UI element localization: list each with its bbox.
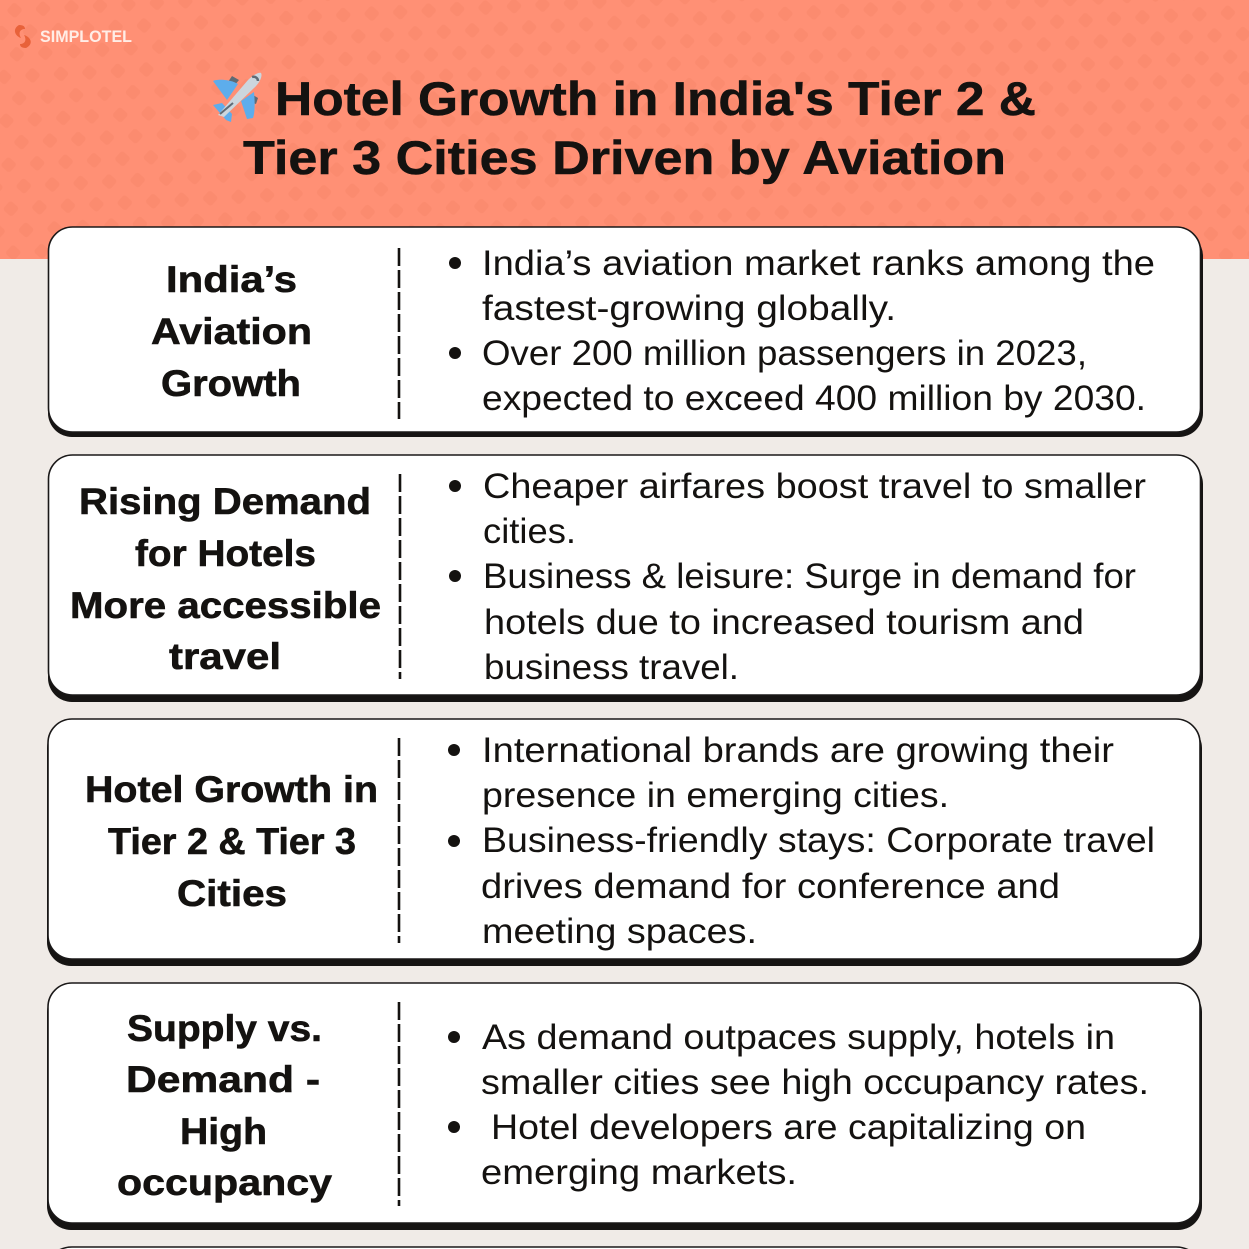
heading: Hotel Growth in bbox=[85, 769, 378, 810]
divider bbox=[398, 248, 400, 419]
heading: travel bbox=[169, 636, 281, 677]
bullet list: hotels due to increased tourism and bbox=[484, 603, 1084, 642]
bullet list: International brands are growing their bbox=[482, 731, 1114, 770]
card body bbox=[48, 983, 1200, 1223]
card body bbox=[48, 719, 1200, 959]
heading: Tier 2 & Tier 3 bbox=[108, 821, 356, 862]
header band bbox=[0, 0, 1249, 259]
bullet list bbox=[449, 467, 1146, 687]
bullet list: Hotel developers are capitalizing on bbox=[491, 1108, 1086, 1147]
card shadow bbox=[47, 724, 1202, 966]
heading: Rising Demand bbox=[79, 481, 371, 522]
bullet list: India’s aviation market ranks among the bbox=[482, 244, 1155, 283]
bullet list: emerging markets. bbox=[481, 1153, 797, 1192]
title line 1: Hotel Growth in India's Tier 2 & bbox=[275, 72, 1036, 125]
heading bbox=[85, 769, 378, 914]
bullet list: Cheaper airfares boost travel to smaller bbox=[483, 467, 1146, 506]
bullet list: Over 200 million passengers in 2023, bbox=[482, 334, 1087, 373]
heading bbox=[70, 481, 381, 677]
icon: airplane bbox=[213, 73, 262, 122]
heading: More accessible bbox=[70, 585, 381, 626]
panel: next card (cropped at bottom) bbox=[48, 1247, 1200, 1249]
heading: Supply vs. bbox=[127, 1008, 322, 1049]
heading: Cities bbox=[177, 873, 287, 914]
heading: Aviation bbox=[151, 311, 312, 352]
heading bbox=[151, 259, 312, 404]
heading: High bbox=[180, 1111, 267, 1152]
divider bbox=[398, 738, 400, 943]
title line 2: Tier 3 Cities Driven by Aviation bbox=[243, 131, 1006, 184]
heading: India’s bbox=[166, 259, 297, 300]
bullet list: As demand outpaces supply, hotels in bbox=[482, 1018, 1115, 1057]
card body bbox=[48, 455, 1200, 695]
bullet list: presence in emerging cities. bbox=[482, 776, 949, 815]
bullet list: expected to exceed 400 million by 2030. bbox=[482, 379, 1146, 418]
heading: Demand - bbox=[126, 1059, 320, 1100]
bullet list: business travel. bbox=[484, 648, 739, 687]
bullet list: drives demand for conference and bbox=[481, 867, 1060, 906]
card body bbox=[48, 227, 1200, 432]
panel: India's aviation growth bbox=[48, 227, 1203, 437]
bullet list: cities. bbox=[483, 512, 576, 551]
logo wordmark: SIMPLOTEL bbox=[40, 28, 132, 46]
bullet list: fastest-growing globally. bbox=[482, 289, 896, 328]
bullet list bbox=[448, 1018, 1149, 1192]
bullet list: Business & leisure: Surge in demand for bbox=[483, 557, 1136, 596]
card shadow bbox=[48, 232, 1203, 437]
bullet list: smaller cities see high occupancy rates. bbox=[481, 1063, 1149, 1102]
logo: Simplotel bbox=[15, 25, 132, 48]
title bbox=[213, 72, 1036, 184]
panel: hotel growth in tier 2 and tier 3 cities bbox=[47, 719, 1202, 966]
heading bbox=[117, 1008, 332, 1203]
icon: logo mark bbox=[15, 25, 31, 48]
bullet list: meeting spaces. bbox=[482, 912, 757, 951]
bullet list bbox=[448, 731, 1155, 951]
divider bbox=[398, 1002, 400, 1206]
bullet list: Business-friendly stays: Corporate travel bbox=[482, 821, 1155, 860]
bullet list bbox=[449, 244, 1155, 418]
panel: rising demand for hotels bbox=[48, 455, 1203, 702]
heading: Growth bbox=[161, 363, 301, 404]
heading: occupancy bbox=[117, 1162, 332, 1203]
divider bbox=[399, 474, 401, 679]
card shadow bbox=[48, 460, 1203, 702]
panel: supply vs demand bbox=[47, 983, 1202, 1230]
heading: for Hotels bbox=[135, 533, 316, 574]
card shadow bbox=[47, 988, 1202, 1230]
